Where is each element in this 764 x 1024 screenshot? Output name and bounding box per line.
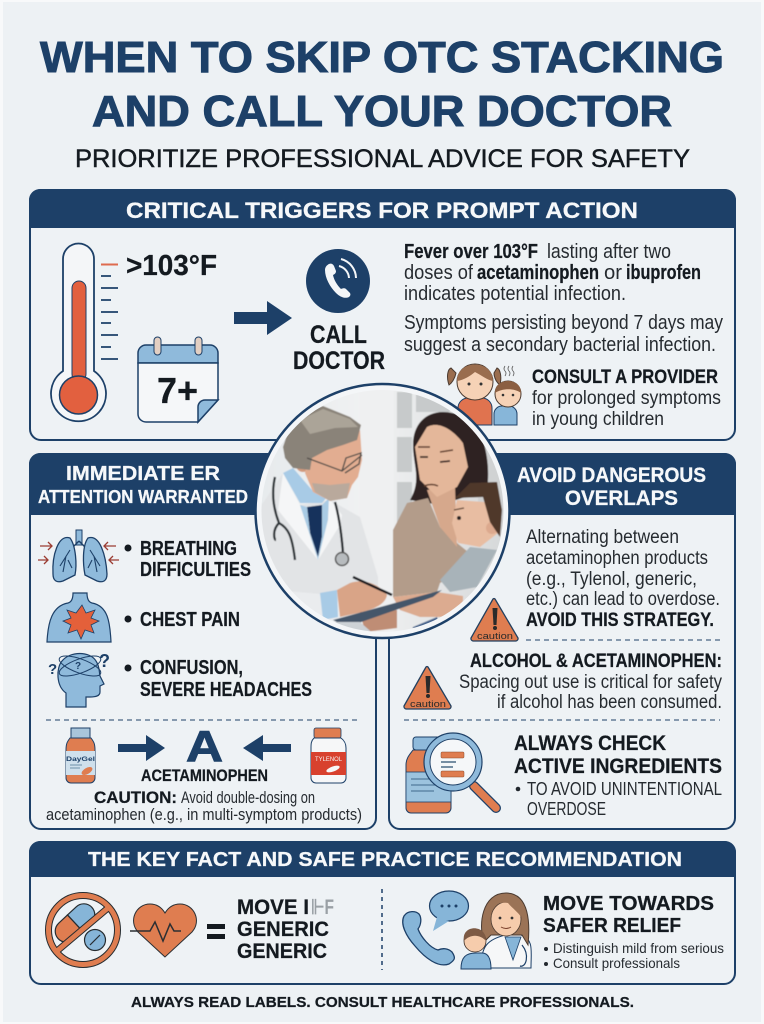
text: caution note: Avoid double-dosing on: [181, 789, 315, 807]
icon: caution triangle: [471, 598, 518, 641]
text: move in generic: MOVE I: [237, 896, 309, 919]
text: consult a provider: [532, 367, 721, 430]
mother sweater: [392, 497, 467, 598]
text: alcohol warning: Spacing out use is critical for safety: [459, 672, 722, 693]
icon: caution triangle: caution: [410, 699, 446, 709]
icon: Tylenol bottle: [311, 728, 346, 783]
text: fever explanation: ibuprofen: [626, 262, 701, 284]
child head: [452, 500, 498, 547]
text: breathing difficulties: [124, 538, 251, 581]
title: WHEN TO SKIP OTC STACKING: [40, 33, 724, 82]
heading: immediate ER: [38, 463, 248, 507]
icon: doctor and child: [461, 893, 531, 969]
icon: DayGel bottle: DayGel: [66, 756, 95, 763]
title: [40, 33, 724, 136]
footer: ALWAYS READ LABELS. CONSULT HEALTHCARE PROFESSIONALS.: [131, 995, 634, 1011]
text: confusion and headaches: [124, 657, 312, 701]
title: AND CALL YOUR DOCTOR: [92, 87, 672, 136]
text: alternating warning: acetaminophen products: [526, 548, 708, 569]
icon: calendar: 7+: [157, 370, 198, 411]
panel: avoid dangerous overlaps: [388, 453, 736, 829]
icon: thermometer: [51, 243, 118, 421]
icon: children: [448, 364, 521, 425]
mother face: [415, 425, 468, 497]
icon: calendar: [138, 337, 218, 422]
mother hair: [410, 412, 488, 505]
icon: confusion head: ?: [75, 661, 81, 672]
heading: avoid dangerous overlaps: [517, 464, 706, 510]
text: fever explanation: doses of: [404, 262, 473, 284]
text: fever explanation: or: [604, 262, 622, 284]
text: always check active ingredients: ACTIVE INGREDIENTS: [514, 755, 722, 778]
arrow: right to A: [118, 735, 165, 761]
text: fever explanation: indicates potential infection.: [404, 283, 626, 305]
text: alternating warning: etc.) can lead to overdose.: [526, 589, 720, 610]
text: acetaminophen label: ACETAMINOPHEN: [141, 766, 268, 785]
heading: avoid dangerous overlaps: AVOID DANGEROUS: [517, 464, 706, 487]
text: consult a provider: in young children: [532, 409, 664, 430]
text: consult a provider: for prolonged symptoms: [532, 388, 721, 409]
heading: avoid dangerous overlaps: OVERLAPS: [565, 487, 678, 510]
text: move in generic: ⊩F: [311, 896, 334, 919]
subtitle: PRIORITIZE PROFESSIONAL ADVICE FOR SAFETY: [75, 145, 690, 173]
icon: DayGel bottle: [66, 728, 95, 783]
heading: critical triggers: CRITICAL TRIGGERS FOR PROMPT ACTION: [126, 198, 638, 223]
text: move towards safer relief: [543, 893, 714, 937]
text: alternating warning: (e.g., Tylenol, generic,: [526, 569, 697, 590]
icon: caution triangle: caution: [477, 631, 513, 641]
icon: confusion head: ?: [99, 651, 110, 671]
text: alternating warning: [526, 527, 720, 631]
text: caution note: [46, 789, 362, 824]
icon: confusion head: ?: [48, 661, 57, 678]
icon: phone: [306, 249, 370, 313]
text: always check active ingredients: ALWAYS CHECK: [514, 732, 666, 755]
text: letter A: A: [186, 722, 223, 771]
mother arm: [393, 592, 463, 617]
text: recommendations list: Consult professionals: [553, 955, 680, 971]
text: consult a provider: CONSULT A PROVIDER: [532, 367, 718, 388]
text: call doctor: CALL: [310, 321, 367, 349]
icon: caution triangle: [404, 666, 451, 709]
icon: heart with pulse: [130, 904, 196, 957]
arrow: left to A: [243, 735, 291, 761]
icon: lungs: [38, 530, 119, 582]
heading: immediate ER: IMMEDIATE ER: [66, 463, 221, 485]
text: fever threshold: >103°F: [126, 250, 217, 282]
text: move in generic: GENERIC: [237, 918, 329, 941]
text: fever explanation: lasting after two: [547, 241, 671, 263]
icon: Tylenol bottle: TYLENOL: [315, 757, 343, 763]
text: breathing difficulties: DIFFICULTIES: [140, 559, 251, 581]
text: confusion and headaches: SEVERE HEADACHES: [140, 679, 312, 701]
icon: bottle and magnifier: [406, 733, 496, 813]
text: recommendations list: [544, 940, 724, 971]
child shirt: [440, 547, 497, 592]
text: recommendations list: Distinguish mild from serious: [553, 940, 724, 956]
text: move towards safer relief: MOVE TOWARDS: [543, 893, 714, 915]
text: alternating warning: AVOID THIS STRATEGY.: [526, 610, 714, 631]
panel: key fact and safe practice: [29, 841, 736, 984]
text: always check active ingredients: OVERDOSE: [527, 799, 606, 819]
text: always check active ingredients: [514, 732, 722, 819]
text: alcohol warning: ALCOHOL & ACETAMINOPHEN:: [470, 651, 722, 672]
text: chest pain: CHEST PAIN: [140, 609, 240, 631]
text: confusion and headaches: CONFUSION,: [140, 657, 243, 679]
text: alternating warning: Alternating between: [526, 527, 679, 548]
text: move in generic: GENERIC: [237, 940, 327, 963]
arrow: to call doctor: [234, 301, 292, 335]
text: always check active ingredients: TO AVOID UNINTENTIONAL: [527, 779, 722, 799]
text: symptoms persisting: [404, 312, 723, 356]
icon: confusion head: [48, 651, 110, 707]
doctor hand and clipboard: [320, 590, 338, 620]
text: caution note: acetaminophen (e.g., in multi-symptom products): [46, 806, 362, 824]
mother neck: [427, 485, 457, 547]
icon: no pills: [48, 896, 118, 964]
text: caution note: CAUTION:: [94, 789, 177, 807]
text: fever explanation: [404, 241, 701, 305]
text: fever explanation: Fever over 103°F: [404, 241, 538, 263]
panel: immediate ER attention: [29, 453, 377, 829]
text: fever explanation: acetaminophen: [477, 262, 599, 284]
text: symptoms persisting: suggest a secondary bacterial infection.: [404, 334, 716, 356]
icon: phone: [403, 912, 454, 965]
text: alcohol warning: [459, 651, 722, 713]
text: call doctor: DOCTOR: [293, 347, 385, 375]
icon: chest pain: [47, 593, 111, 642]
heading: key fact: THE KEY FACT AND SAFE PRACTICE RECOMMENDATION: [88, 849, 682, 871]
photo: doctor with mother and child: [255, 384, 518, 641]
doctor head: [296, 468, 306, 472]
text: equals sign: [207, 924, 225, 939]
text: breathing difficulties: BREATHING: [140, 538, 237, 560]
doctor coat: [284, 502, 378, 594]
text: move in generic: [237, 896, 334, 963]
text: call doctor: [293, 321, 385, 375]
panel: critical triggers: [29, 189, 736, 440]
text: move towards safer relief: SAFER RELIEF: [543, 915, 681, 937]
heading: immediate ER: ATTENTION WARRANTED: [38, 487, 248, 507]
icon: speech bubble: [430, 891, 468, 931]
text: alcohol warning: if alcohol has been consumed.: [497, 692, 722, 713]
text: symptoms persisting: Symptoms persisting beyond 7 days may: [404, 312, 723, 334]
